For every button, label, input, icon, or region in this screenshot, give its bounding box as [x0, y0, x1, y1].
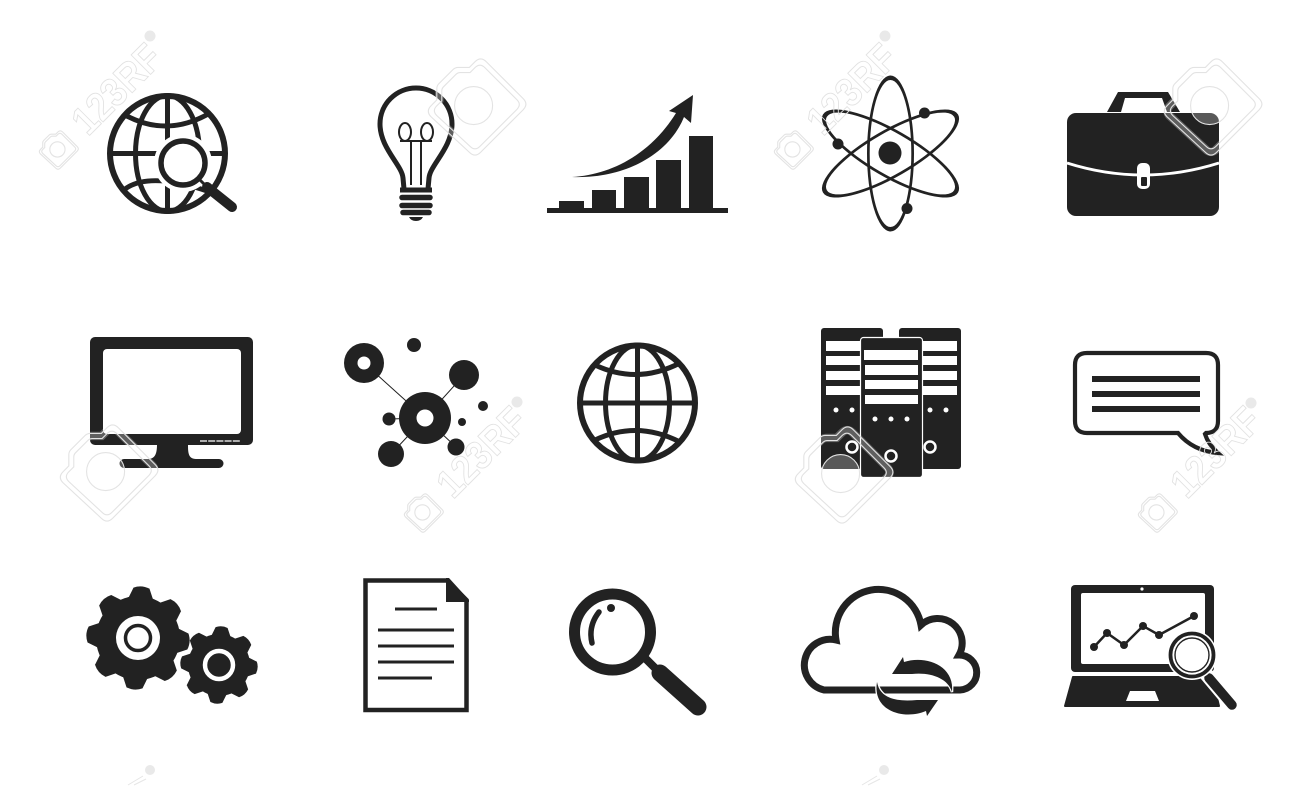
small gear [180, 626, 258, 704]
watermark: small stamp middle centre: 123RF [428, 399, 536, 506]
icon: cloud sync [804, 589, 977, 716]
watermark: bottom edge centre [862, 765, 889, 785]
watermark: small stamp middle right: 123RF [1162, 399, 1270, 506]
middle server [860, 338, 922, 478]
watermark: large camera over servers [785, 417, 896, 527]
icon: magnifying glass [574, 594, 698, 707]
laptop magnifier [1167, 630, 1232, 705]
growth arrow [572, 95, 693, 177]
icon: light bulb [380, 88, 452, 221]
watermark: small stamp middle right [1134, 398, 1270, 534]
icon: growth bar chart with arrow [547, 95, 728, 213]
watermark: large camera under monitor [50, 415, 161, 525]
icon: briefcase [1067, 92, 1219, 216]
watermark: small stamp top left [35, 30, 171, 171]
sync arrows [876, 657, 952, 716]
watermark: large camera over briefcase [1154, 49, 1265, 159]
watermark: small stamp top centre: 123RF [798, 36, 906, 143]
watermark: small stamp top centre [770, 30, 906, 171]
icon: document [366, 578, 469, 710]
icon: speech bubble [1075, 353, 1218, 453]
watermark: bottom edge left [128, 765, 155, 785]
watermark: small stamp middle centre [400, 396, 536, 534]
icon: server towers [821, 328, 961, 478]
watermark: small stamp top left: 123RF [63, 36, 171, 143]
icon: atom [811, 76, 970, 232]
icon: computer monitor [90, 337, 253, 468]
icon: globe [580, 345, 695, 461]
large gear [86, 586, 190, 690]
icon: globe with magnifier [110, 96, 232, 212]
line chart [1090, 612, 1198, 651]
icon: laptop with chart and magnifier [1065, 585, 1232, 706]
icon: molecule network [344, 338, 488, 467]
watermark: large camera over bulb [418, 49, 529, 159]
icon: gears [86, 586, 258, 704]
